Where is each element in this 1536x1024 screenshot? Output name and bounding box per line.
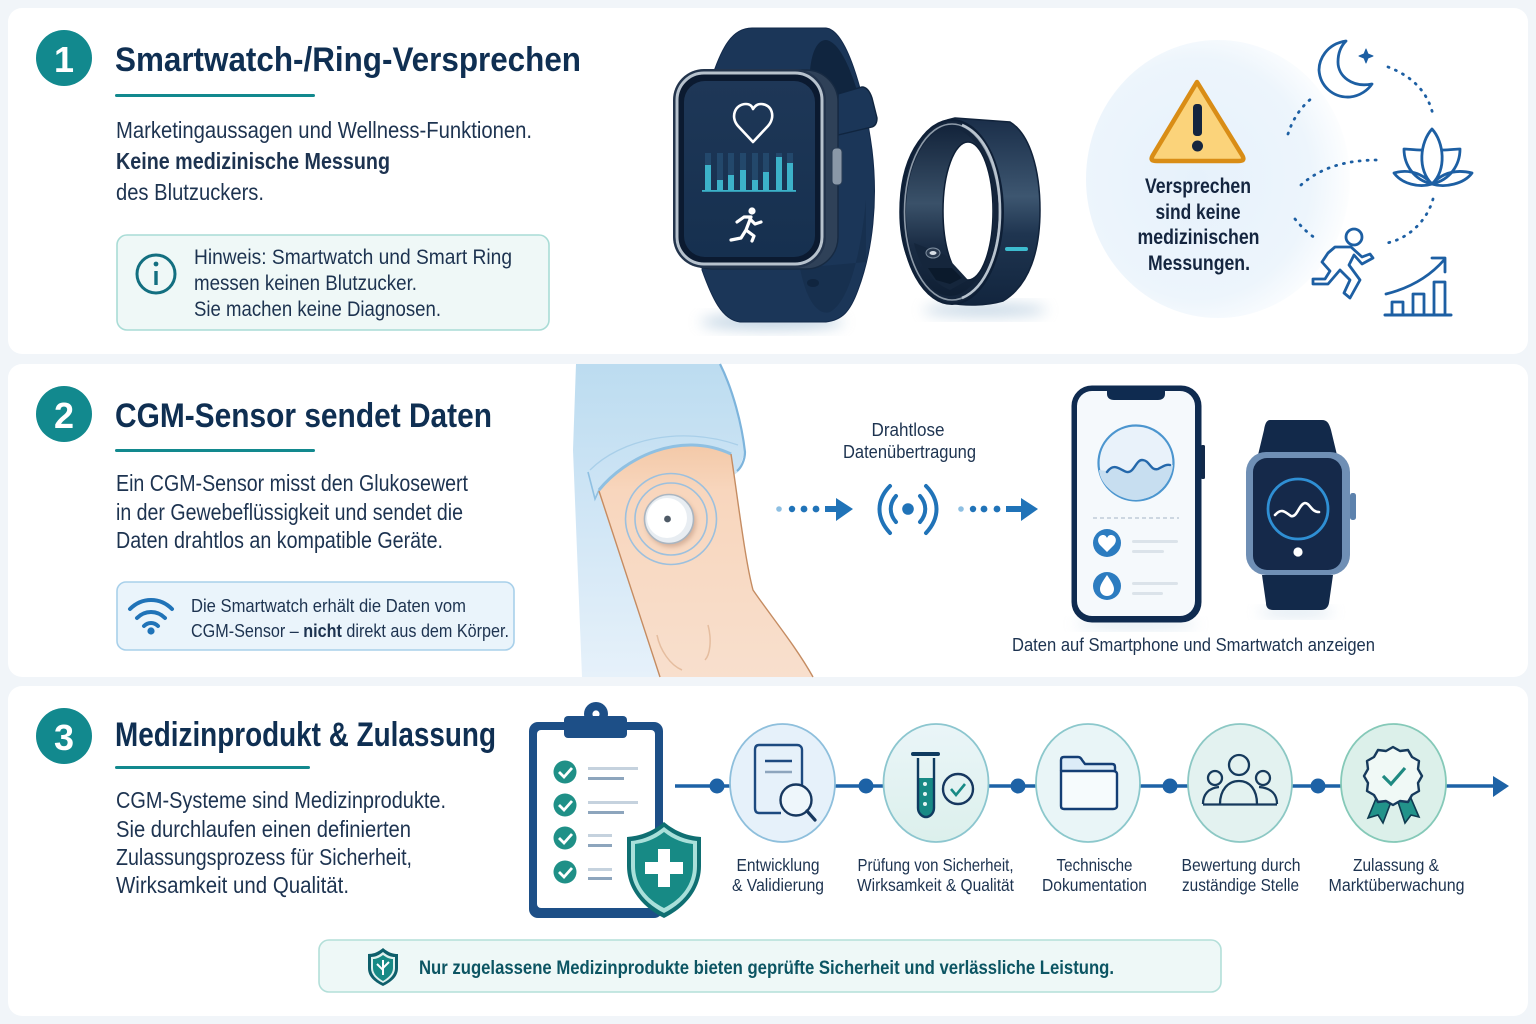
text block 2: Daten drahtlos an kompatible Geräte. — [116, 527, 443, 553]
heading 3: Medizinprodukt & Zulassung — [115, 716, 496, 754]
step label: Technische — [1056, 855, 1132, 875]
arrow: wireless to devices — [958, 498, 1038, 521]
step label — [732, 855, 824, 895]
warning text: sind keine — [1156, 201, 1240, 224]
number badge 1 — [36, 30, 92, 86]
step label — [1328, 855, 1464, 895]
number badge 3: 3 — [54, 717, 74, 758]
number badge 3 — [36, 708, 92, 764]
callout: Smartwatch receives data — [117, 582, 514, 650]
icon: folder — [1061, 757, 1117, 809]
text block 1 — [116, 117, 532, 205]
warning text — [1138, 175, 1260, 275]
step label — [1042, 855, 1147, 895]
step 5: Zulassung und Marktueberwachung — [1328, 724, 1464, 895]
step 1: Entwicklung und Validierung — [730, 724, 835, 895]
icon: group of people — [1203, 755, 1277, 804]
icon: runner outline — [1313, 229, 1373, 298]
panel 2: CGM-Sensor sendet Daten — [8, 364, 1528, 677]
step 2: Pruefung — [857, 724, 1014, 895]
heading underline 2 — [115, 449, 315, 452]
warning text: Messungen. — [1148, 252, 1250, 275]
checklist — [554, 760, 638, 884]
illustration: smart ring — [900, 118, 1047, 316]
icon: heart badge — [1093, 529, 1121, 557]
number badge 2: 2 — [54, 395, 74, 436]
label: wireless transfer: Drahtlose — [872, 419, 944, 440]
callout: warning circle — [1086, 40, 1350, 318]
icon: moon — [1319, 41, 1372, 97]
icon: lotus — [1394, 129, 1472, 186]
step 4: Bewertung — [1182, 724, 1300, 895]
icon: test tube and check — [913, 754, 973, 817]
icon: medical shield — [627, 822, 701, 918]
callout text: Hinweis: Smartwatch und Smart Ring — [194, 246, 512, 269]
number badge 1: 1 — [54, 39, 74, 80]
step label — [857, 855, 1014, 895]
icon: drop badge — [1093, 572, 1121, 600]
illustration: smartwatch — [673, 28, 877, 329]
icon: document and magnifier — [755, 745, 815, 820]
number badge 2 — [36, 386, 92, 442]
icon: star — [1359, 49, 1373, 63]
heading underline 3 — [115, 766, 310, 769]
heading 1: Smartwatch-/Ring-Versprechen — [115, 41, 581, 79]
step label: Prüfung von Sicherheit, — [858, 855, 1014, 875]
callout text — [194, 246, 512, 321]
callout text: CGM-Sensor – nicht direkt aus dem Körper. — [191, 620, 509, 641]
panel 1: Smartwatch-/Ring-Versprechen — [8, 8, 1528, 354]
callout: key message — [319, 940, 1221, 992]
callout text: messen keinen Blutzucker. — [194, 272, 417, 295]
icon: wifi — [130, 600, 172, 635]
step label: Entwicklung — [736, 855, 820, 875]
wellness icons with dotted arcs — [1288, 41, 1472, 315]
step label — [1182, 855, 1300, 895]
text block 1: Keine medizinische Messung — [116, 148, 390, 174]
text block 3: CGM-Systeme sind Medizinprodukte. — [116, 787, 446, 813]
panel 3: Medizinprodukt und Zulassung — [8, 686, 1528, 1016]
icon: runner — [731, 207, 761, 241]
illustration: arm with sensor — [573, 364, 813, 677]
step 3: Technische Dokumentation — [1036, 724, 1147, 895]
illustration: clipboard with shield — [529, 702, 701, 918]
process timeline line — [675, 776, 1509, 797]
text block 2: in der Gewebeflüssigkeit und sendet die — [116, 499, 463, 525]
callout text: Die Smartwatch erhält die Daten vom — [191, 595, 466, 616]
label: wireless transfer — [843, 419, 976, 462]
sensor with signal rings — [626, 474, 716, 564]
icon: small shield — [368, 948, 398, 986]
warning text: medizinischen — [1138, 226, 1260, 249]
icon: heart — [734, 104, 772, 142]
heading 2: CGM-Sensor sendet Daten — [115, 397, 492, 435]
callout: Hinweis — [117, 235, 549, 330]
step label: & Validierung — [732, 875, 824, 895]
label: wireless transfer: Datenübertragung — [843, 441, 976, 462]
icon: warning triangle — [1152, 82, 1243, 161]
text block 3: Sie durchlaufen einen definierten — [116, 816, 411, 842]
icon: wireless signal — [880, 486, 936, 533]
activity bars — [702, 153, 796, 192]
glucose gauge — [1098, 426, 1174, 500]
caption: devices: Daten auf Smartphone und Smartwatch anzeigen — [1012, 634, 1375, 655]
callout text: Sie machen keine Diagnosen. — [194, 298, 441, 321]
text block 3: Zulassungsprozess für Sicherheit, — [116, 844, 412, 870]
step label: Marktüberwachung — [1328, 875, 1464, 895]
step label: Zulassung & — [1353, 855, 1439, 875]
arrow: sensor to wireless — [776, 498, 853, 521]
illustration: device smartwatch — [1246, 420, 1356, 616]
text block 3 — [116, 787, 446, 898]
text block 3: Wirksamkeit und Qualität. — [116, 872, 349, 898]
warning text: Versprechen — [1145, 175, 1251, 198]
text block 1: des Blutzuckers. — [116, 179, 264, 205]
step label: Dokumentation — [1042, 875, 1147, 895]
heading underline 1 — [115, 94, 315, 97]
step label: zuständige Stelle — [1182, 875, 1299, 895]
step label: Wirksamkeit & Qualität — [857, 875, 1014, 895]
callout text — [191, 595, 509, 641]
illustration: smartphone — [1072, 386, 1205, 628]
message text: Nur zugelassene Medizinprodukte bieten geprüfte Sicherheit und verlässliche Leistung. — [419, 957, 1114, 979]
icon: approval rosette — [1364, 747, 1422, 823]
text block 1: Marketingaussagen und Wellness-Funktionen. — [116, 117, 532, 143]
icon: info — [137, 255, 175, 293]
icon: growth chart — [1385, 258, 1451, 315]
text block 2 — [116, 470, 469, 553]
text block 2: Ein CGM-Sensor misst den Glukosewert — [116, 470, 469, 496]
step label: Bewertung durch — [1182, 855, 1300, 875]
